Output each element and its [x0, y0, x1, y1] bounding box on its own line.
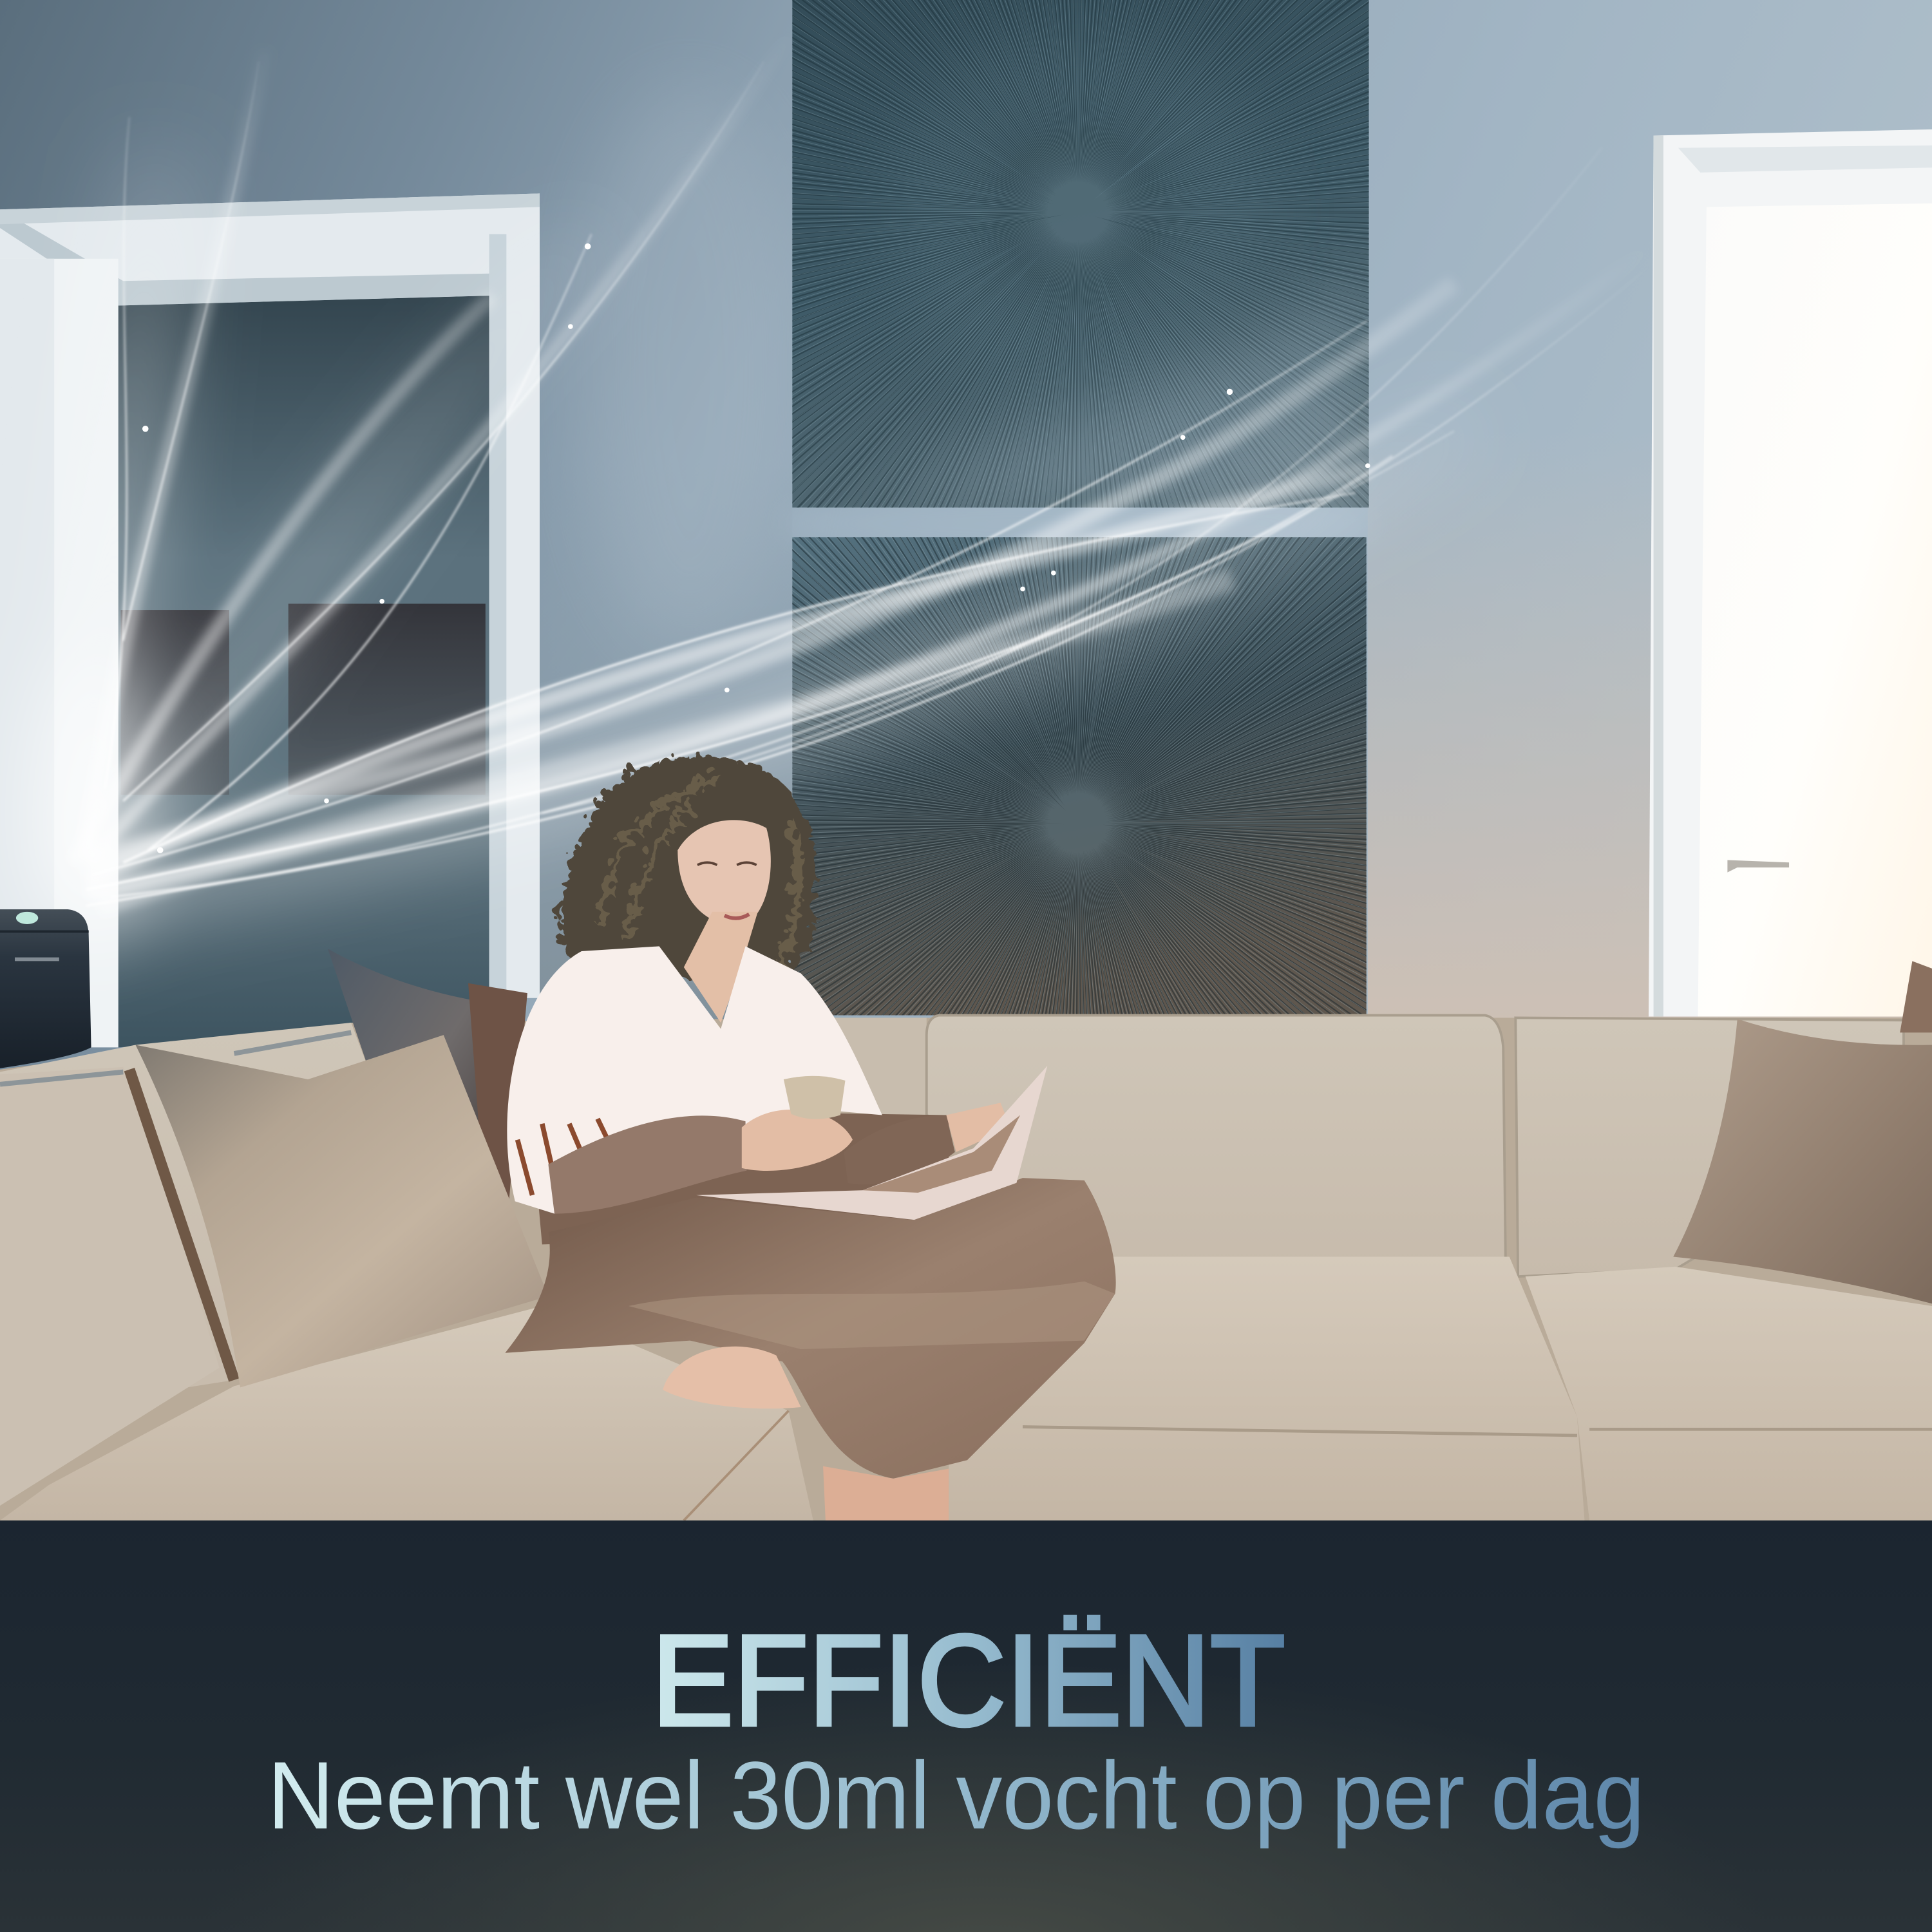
airflow soft bands: [74, 37, 1651, 905]
door frame: [0, 193, 540, 1047]
door frame: [1649, 129, 1932, 1016]
back right: [1515, 1018, 1904, 1276]
seat right: [1526, 1267, 1932, 1520]
dark pillow: [328, 949, 505, 1232]
left doorway: [0, 193, 540, 1047]
sofa base: [0, 1018, 1932, 1520]
foot: [663, 1347, 801, 1408]
door leaf: [1698, 204, 1932, 1016]
door opening: [118, 296, 493, 1047]
hair: [554, 748, 810, 987]
airflow: [24, 37, 1651, 949]
airflow glow: [24, 148, 1479, 949]
lower leg: [823, 1466, 949, 1520]
airflow fine strands: [86, 62, 1651, 905]
skirt: [505, 1178, 1116, 1479]
magazine: [696, 1066, 1047, 1220]
sleeves: [548, 1115, 746, 1214]
seat centre: [949, 1257, 1584, 1520]
back centre-left: [826, 1018, 927, 1115]
under-garment fill: [530, 1109, 949, 1244]
blouse embroidery: [518, 1119, 614, 1195]
frame moulding: [0, 209, 489, 305]
right door: [1649, 129, 1932, 1016]
back left: [0, 1023, 370, 1417]
left arm cushion: [0, 1067, 220, 1506]
woman: [505, 748, 1116, 1520]
neck: [684, 912, 758, 1023]
facial features: [697, 862, 757, 918]
painting top: [792, 0, 1369, 507]
sofa: [0, 949, 1932, 1520]
small far-right pillow: [1900, 961, 1932, 1032]
subheading: Neemt wel 30ml vocht op per dag: [267, 1741, 1645, 1849]
blouse: [507, 946, 882, 1214]
artworks in next room: [121, 604, 486, 795]
heading: EFFICIËNT: [652, 1608, 1285, 1753]
door handle: [1727, 860, 1789, 873]
sparkles: [142, 243, 1370, 853]
right pillow: [1673, 1019, 1932, 1303]
wall: [0, 0, 1932, 1070]
bottom band: [0, 1520, 1932, 1932]
side wall panel: [0, 259, 118, 1047]
hands and cup: [742, 1110, 853, 1171]
painting bottom: [792, 537, 1367, 1057]
face: [677, 820, 771, 927]
dehumidifier: [0, 909, 91, 1068]
photo scene: [0, 0, 1932, 1520]
back centre: [927, 1016, 1506, 1269]
seat left: [0, 1306, 813, 1520]
brown pillow: [468, 983, 527, 1244]
left pillow: [135, 1035, 548, 1387]
